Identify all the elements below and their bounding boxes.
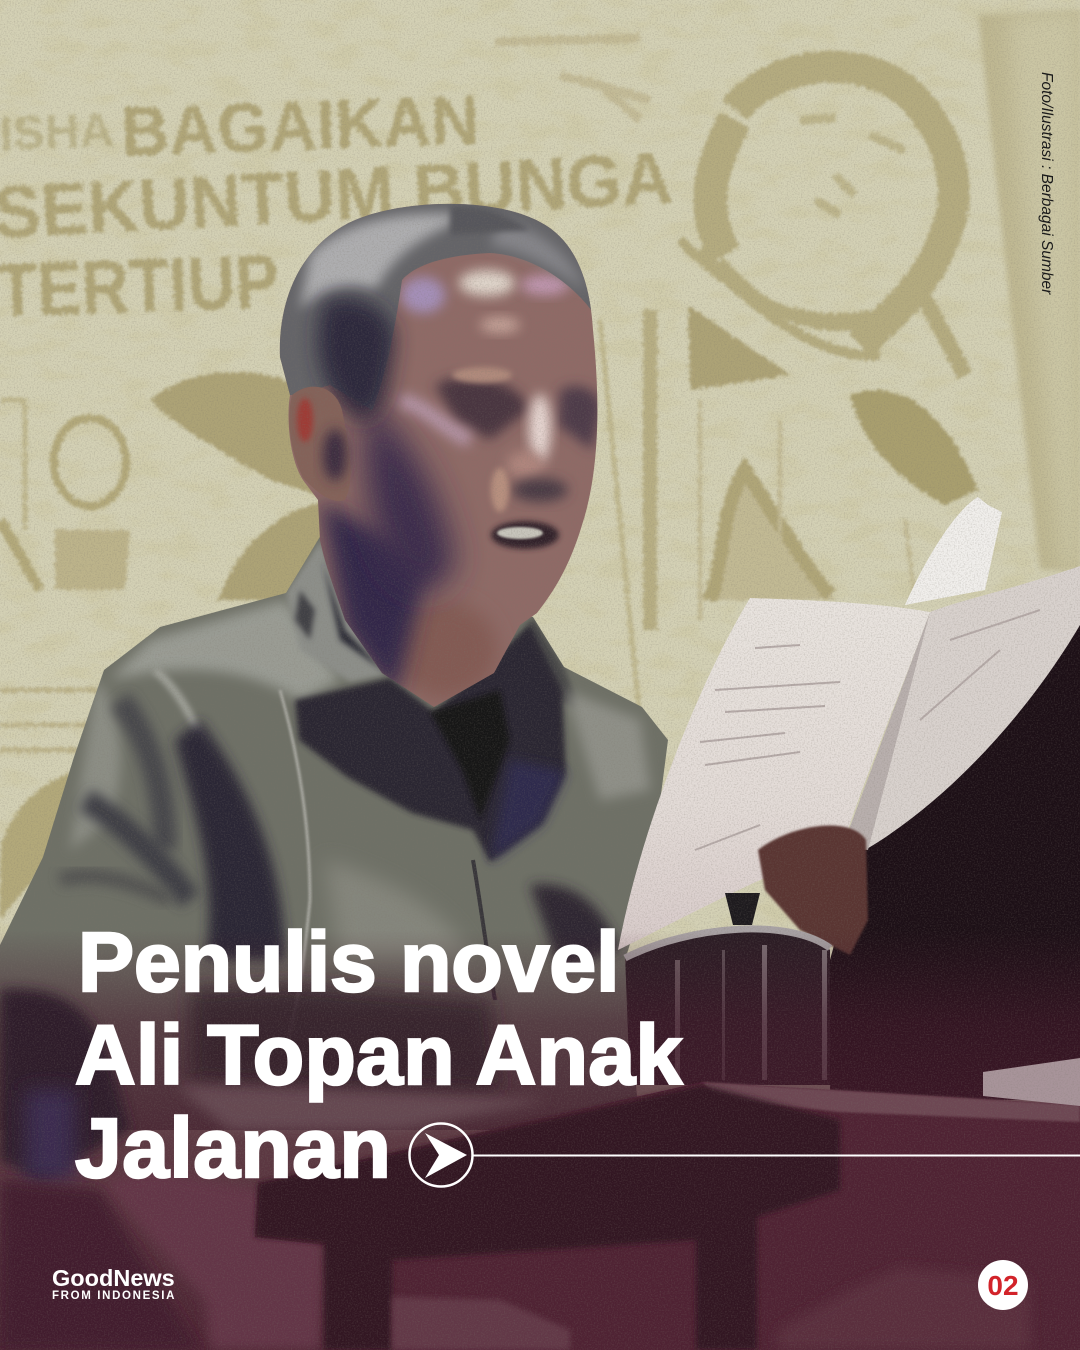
man's head and neck [280, 204, 598, 707]
cheek shadow [364, 400, 455, 590]
purple sleeve shade [25, 1090, 75, 1180]
dark inner shirt shadow [295, 625, 566, 862]
title [74, 915, 684, 1195]
lit forearm strip [103, 1170, 324, 1350]
dark shadow on lower shirt [190, 985, 500, 1090]
logo: FROM INDONESIA [52, 1290, 176, 1302]
newspaper headline: TERTIUP [0, 239, 280, 334]
newspaper headline [0, 80, 675, 334]
page number badge [978, 1260, 1028, 1310]
page number badge: 02 [987, 1270, 1019, 1301]
newspaper sketches [0, 38, 978, 920]
photo credit: Foto/Ilustrasi : Berbagai Sumber [1038, 72, 1055, 294]
dark right background [830, 610, 1080, 1100]
nose [529, 394, 551, 462]
arrow circle icon [410, 1124, 472, 1186]
neck [393, 602, 497, 698]
newspaper headline: SEKUNTUM BUNGA [0, 136, 675, 254]
metal cup on lectern [625, 893, 830, 1085]
lit sleeve band [175, 1085, 550, 1130]
newspaper page edge band [978, 10, 1080, 570]
earphone cable [280, 690, 310, 1050]
title: Ali Topan Anak [75, 1008, 683, 1102]
newspaper headline: BAGAIKAN [120, 80, 480, 171]
logo: GoodNews [52, 1265, 175, 1291]
newspaper headline: ISHA [0, 104, 115, 161]
logo [52, 1265, 176, 1302]
forehead highlights [459, 270, 515, 296]
man's shirt and torso [0, 530, 680, 1140]
arrow line [472, 1154, 1080, 1156]
dark maroon gradient overlay [0, 930, 1080, 1350]
title: Jalanan [75, 1101, 391, 1195]
lower left shade [0, 1180, 200, 1350]
shirt placket [473, 860, 495, 1000]
open book with handwriting [618, 497, 1080, 950]
mouth [491, 521, 559, 549]
hand holding book [758, 826, 868, 955]
collar [286, 540, 385, 682]
eye sockets [435, 377, 528, 440]
lectern surface [255, 1058, 1080, 1350]
ear [289, 387, 351, 501]
hair [274, 198, 595, 410]
title: Penulis novel [78, 915, 620, 1009]
left arm in shadow [0, 989, 130, 1180]
